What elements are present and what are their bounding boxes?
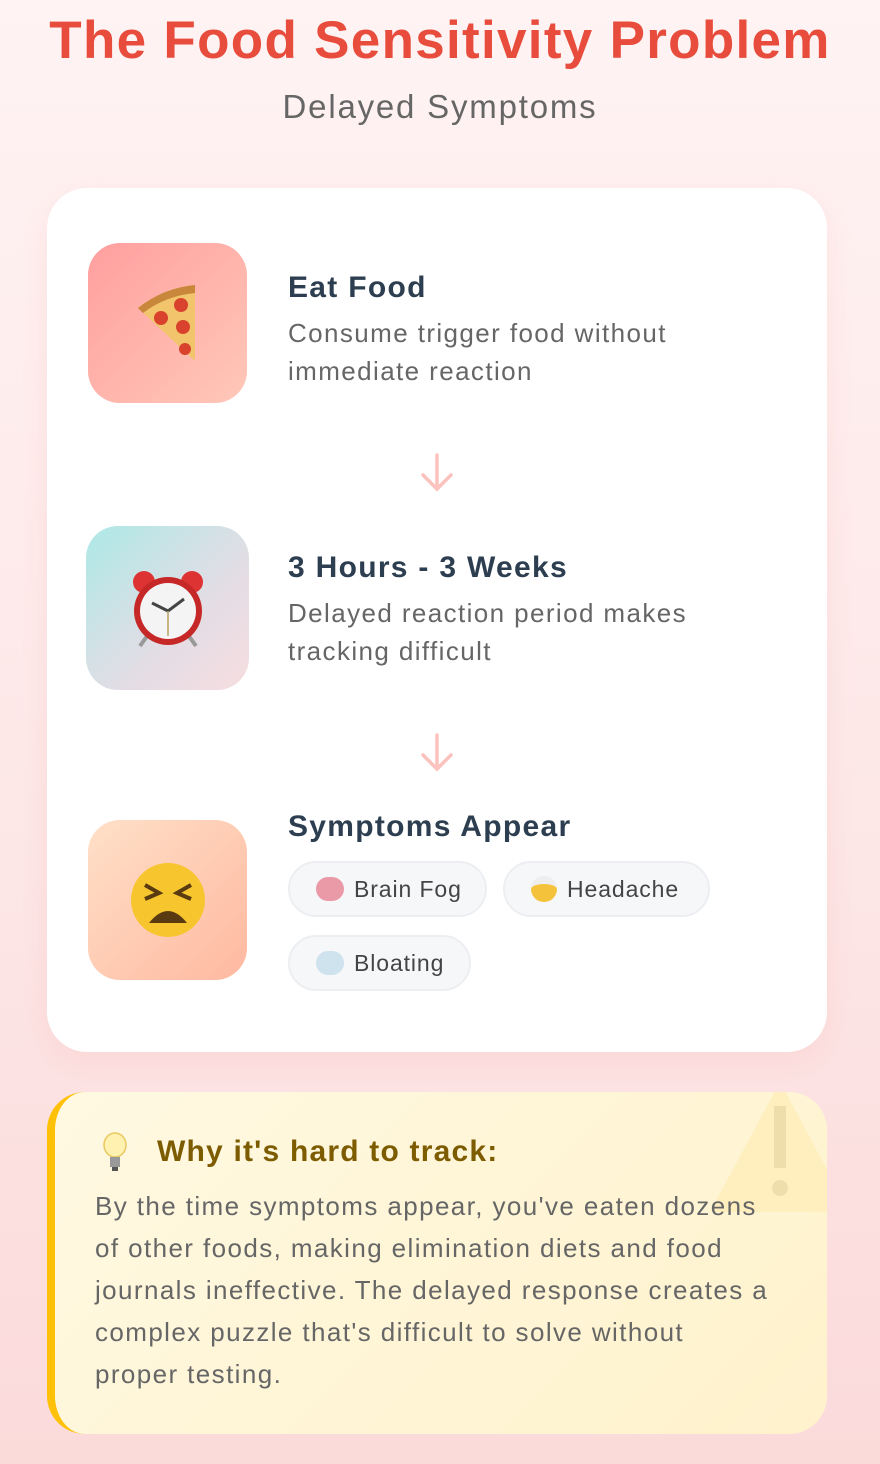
callout body: complex puzzle that's difficult to solve without (95, 1317, 684, 1347)
tag: brain fog (288, 861, 487, 917)
step 1 text: immediate reaction (288, 356, 533, 386)
step 1 text: Eat Food (288, 271, 427, 304)
icon: warning watermark (710, 1092, 827, 1212)
callout body: proper testing. (95, 1359, 282, 1389)
step 1 text (288, 271, 667, 386)
icon: alarm clock (86, 526, 249, 690)
step 2 text (288, 551, 687, 666)
arrow 2 (421, 733, 453, 772)
tag: headache (503, 861, 710, 917)
callout: why it's hard to track (47, 1092, 827, 1434)
tag: bloating: Bloating (354, 950, 444, 976)
tag: bloating (288, 935, 471, 991)
arrow 1 (421, 453, 453, 492)
icon: pizza (88, 243, 247, 403)
step 1 text: Consume trigger food without (288, 318, 667, 348)
step 2 text: 3 Hours - 3 Weeks (288, 551, 568, 584)
icon: light bulb (103, 1132, 127, 1171)
icon: tired face (88, 820, 247, 980)
callout body: journals ineffective. The delayed response creates a (95, 1275, 768, 1305)
callout body (94, 1191, 768, 1389)
step 2 text: Delayed reaction period makes (288, 598, 687, 628)
callout body: By the time symptoms appear, you've eaten dozens (95, 1191, 757, 1221)
title: The Food Sensitivity Problem (49, 11, 831, 70)
tag: headache: Headache (567, 876, 679, 902)
callout heading: Why it's hard to track: (157, 1135, 498, 1168)
symptom tags (288, 861, 710, 991)
step 2 text: tracking difficult (288, 636, 492, 666)
tag: brain fog: Brain Fog (354, 876, 462, 902)
callout body: of other foods, making elimination diets and food (95, 1233, 723, 1263)
subtitle: Delayed Symptoms (283, 88, 597, 125)
step 3 heading: Symptoms Appear (288, 810, 571, 843)
panel: timeline card (47, 188, 827, 1052)
